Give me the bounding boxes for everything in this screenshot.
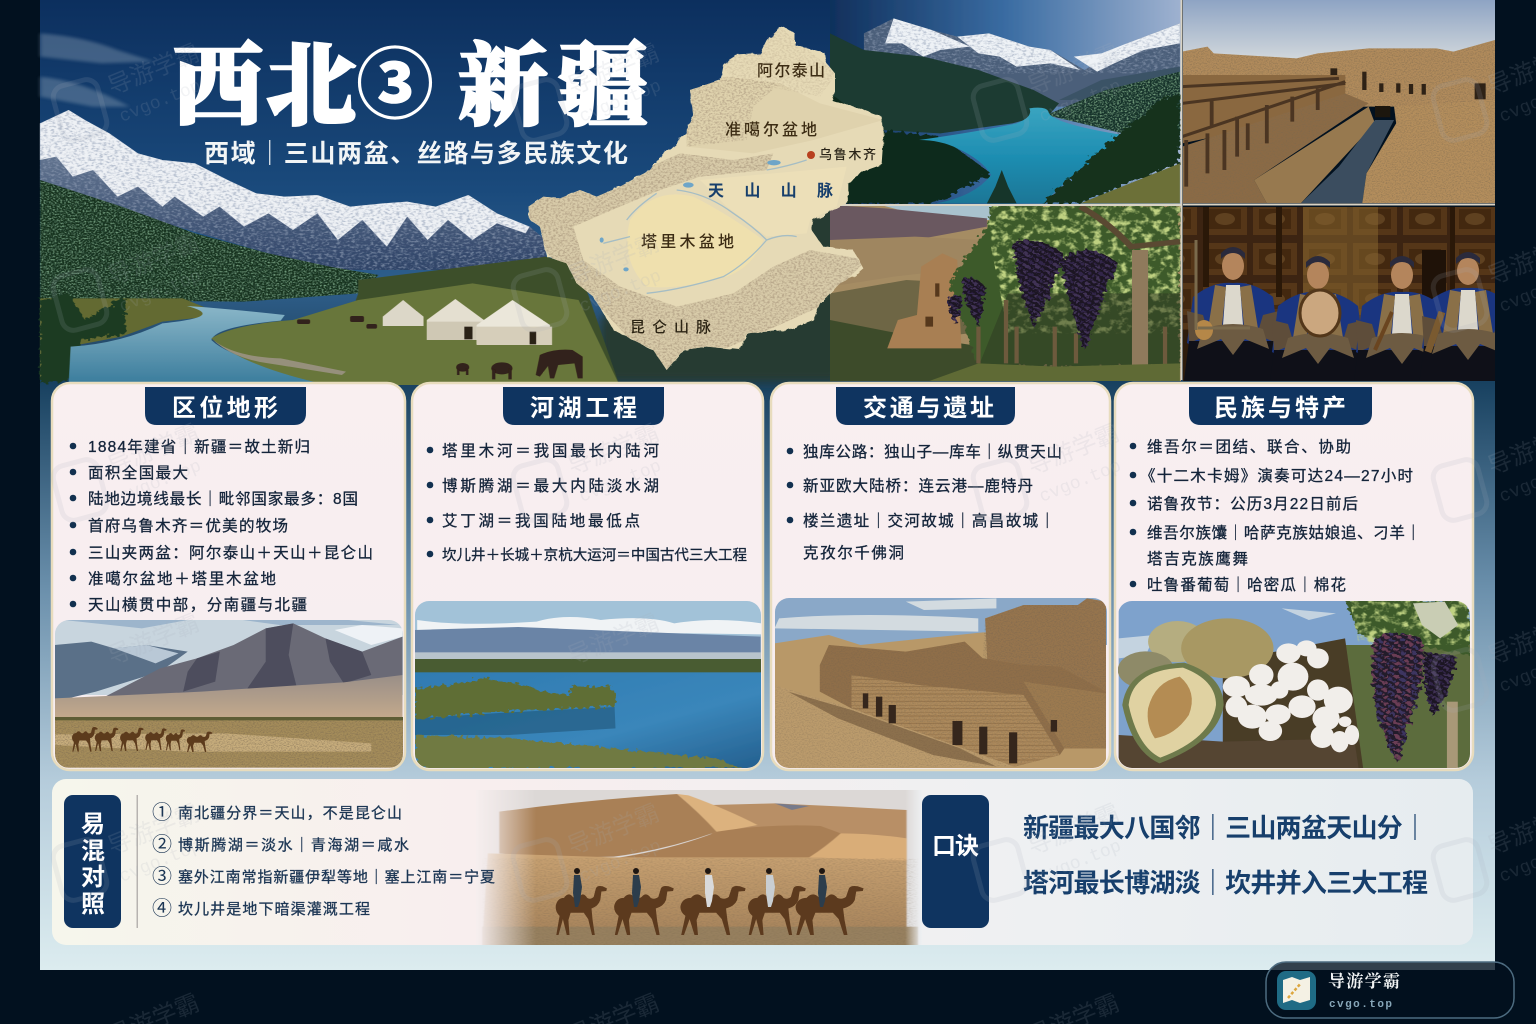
watermarks: 导游学霸	[564, 40, 663, 101]
photo: vineyard with mud ruins	[830, 205, 1182, 382]
bullet list: 塔里木河＝我国最长内陆河	[442, 442, 659, 460]
confusion list	[152, 801, 495, 920]
map labels: 塔里木盆地	[641, 233, 734, 251]
title: 新	[458, 38, 548, 137]
lower poster background	[40, 380, 1495, 970]
yurts	[383, 299, 552, 345]
watermarks: 导游学霸	[564, 800, 663, 861]
photo: ancient ruins and karez channel	[1182, 0, 1496, 203]
confusion list: 博斯腾湖＝淡水｜青海湖＝咸水	[178, 837, 409, 854]
divider	[136, 795, 138, 928]
watermarks: 导游学霸	[104, 420, 203, 481]
panel: rivers, lakes and engineering	[412, 383, 766, 770]
bullet list: 克孜尔千佛洞	[803, 544, 904, 562]
bullet list: 三山夹两盆：阿尔泰山＋天山＋昆仑山	[88, 544, 373, 562]
heading: transport and heritage: 交通与遗址	[863, 394, 994, 422]
bullet list: 诺鲁孜节：公历3月22日前后	[1147, 495, 1358, 513]
logo badge: cvgo.top	[1329, 999, 1392, 1011]
bullet list	[787, 443, 1062, 562]
tag: mnemonic	[922, 795, 989, 928]
bullet list: 陆地边境线最长｜毗邻国家最多：8国	[88, 489, 358, 508]
title: ③	[356, 41, 434, 129]
tag: easily confused: 照	[81, 891, 105, 918]
bullet list: 博斯腾湖＝最大内陆淡水湖	[442, 477, 659, 495]
image dividers	[830, 0, 1495, 380]
title: 北	[266, 38, 356, 137]
tag: easily confused: 易	[81, 811, 105, 838]
watermarks: 导游学霸	[104, 40, 203, 101]
watermarks: 导游学霸	[104, 800, 203, 861]
watermarks: cvgo.top	[117, 837, 204, 888]
confusion list: ④	[152, 897, 172, 920]
panel: transport and heritage sites	[770, 383, 1110, 770]
watermarks: cvgo.top	[117, 267, 204, 318]
tag: mnemonic: 口诀	[932, 833, 979, 860]
instruments	[1195, 240, 1442, 352]
map labels: 乌鲁木齐	[819, 147, 876, 162]
mnemonic text: 新疆最大八国邻｜三山两盆天山分｜	[1023, 813, 1428, 843]
bullet list: 天山横贯中部，分南疆与北疆	[88, 596, 307, 614]
watermarks: 导游学霸	[564, 420, 663, 481]
bullet list	[427, 442, 747, 564]
tag: easily confused: 对	[81, 864, 105, 891]
bullet list: 坎儿井＋长城＋京杭大运河＝中国古代三大工程	[442, 547, 747, 564]
heading: location and terrain	[145, 387, 306, 425]
logo badge: 导游学霸	[1328, 972, 1400, 991]
bullet list: 新亚欧大陆桥：连云港—鹿特丹	[803, 477, 1033, 495]
photo: Bosten Lake	[413, 595, 766, 769]
subtitle: 西域｜三山两盆、丝路与多民族文化	[204, 140, 628, 168]
panel: easily confused facts and mnemonic	[52, 779, 1473, 947]
watermarks: cvgo.top	[1037, 837, 1124, 888]
bullet list: 塔吉克族鹰舞	[1147, 550, 1248, 568]
sky	[40, 0, 840, 380]
map labels: 天山山脉	[708, 181, 833, 200]
watermarks: cvgo.top	[577, 837, 664, 888]
heading: ethnic culture and specialties	[1189, 387, 1372, 425]
watermarks: cvgo.top	[117, 457, 204, 508]
bullet list: 独库公路：独山子—库车｜纵贯天山	[803, 443, 1062, 461]
watermarks: 导游学霸	[564, 610, 663, 671]
bullet list: 维吾尔族馕｜哈萨克族姑娘追、刁羊｜	[1147, 524, 1421, 542]
bullet list: 首府乌鲁木齐＝优美的牧场	[88, 517, 288, 535]
map labels	[630, 62, 876, 336]
confusion list: 南北疆分界＝天山，不是昆仑山	[178, 805, 402, 822]
heading: rivers and lakes: 河湖工程	[530, 395, 637, 422]
map labels: 准噶尔盆地	[725, 121, 817, 139]
confusion list: ③	[152, 865, 172, 888]
logo badge	[1266, 962, 1514, 1018]
title	[173, 38, 648, 137]
watermarks: 导游学霸	[1024, 40, 1123, 101]
panel: ethnic culture and specialties	[1115, 383, 1473, 770]
watermarks: cvgo.top	[577, 77, 664, 128]
heading: ethnic culture and specialties: 民族与特产	[1214, 395, 1346, 422]
bullet list: 1884年建省｜新疆＝故土新归	[88, 438, 310, 456]
heading: rivers and lakes	[503, 387, 664, 425]
photo: desert camel caravan	[476, 780, 924, 947]
watermarks: 导游学霸	[104, 610, 203, 671]
watermarks: 导游学霸	[564, 230, 663, 291]
horses	[297, 316, 583, 379]
map of Xinjiang	[520, 27, 883, 373]
title: 西	[173, 38, 263, 137]
watermarks: cvgo.top	[1037, 77, 1124, 128]
title: 疆	[558, 38, 648, 137]
confusion list: ②	[152, 833, 172, 856]
photo: turquoise lake	[830, 0, 1182, 205]
bullet list: 维吾尔＝团结、联合、协助	[1147, 438, 1351, 456]
bullet list: 准噶尔盆地＋塔里木盆地	[88, 570, 276, 588]
heading: transport and heritage	[836, 387, 1015, 425]
bullet list: 楼兰遗址｜交河故城｜高昌故城｜	[803, 512, 1055, 530]
bullet list: 《十二木卡姆》演奏可达24—27小时	[1140, 467, 1413, 485]
watermarks: cvgo.top	[1037, 457, 1124, 508]
bullet list: 吐鲁番葡萄｜哈密瓜｜棉花	[1147, 576, 1346, 594]
watermarks: cvgo.top	[577, 457, 664, 508]
map labels: 阿尔泰山	[757, 62, 825, 80]
confusion list: 塞外江南常指新疆伊犁等地｜塞上江南＝宁夏	[178, 868, 495, 886]
photo: camels below mountains	[50, 615, 408, 768]
bullet list: 艾丁湖＝我国陆地最低点	[442, 512, 640, 530]
confusion list: 坎儿井是地下暗渠灌溉工程	[178, 901, 370, 918]
watermarks: 导游学霸	[104, 230, 203, 291]
photo: Loulan ruins	[770, 595, 1110, 768]
watermarks: cvgo.top	[577, 267, 664, 318]
tag: easily confused	[64, 795, 121, 928]
bullet list	[1130, 438, 1421, 594]
watermarks: 导游学霸	[1024, 420, 1123, 481]
mnemonic text	[1023, 813, 1428, 898]
mnemonic text: 塔河最长博湖淡｜坎井并入三大工程	[1023, 868, 1428, 898]
confusion list: ①	[152, 801, 172, 824]
watermarks: cvgo.top	[117, 77, 204, 128]
icon: folded map	[1277, 971, 1316, 1010]
left landscape: snow peaks, river, yurts	[40, 33, 619, 385]
dark terrain behind map	[600, 195, 840, 382]
panel: location and terrain	[50, 383, 408, 770]
map labels: 昆仑山脉	[630, 319, 711, 336]
photo: melons, cotton and grapes	[1118, 600, 1472, 770]
photo: muqam musicians	[1183, 207, 1495, 381]
bullet list	[70, 438, 373, 614]
bullet list: 面积全国最大	[88, 464, 188, 482]
tag: easily confused: 混	[81, 838, 105, 865]
heading: location and terrain: 区位地形	[172, 394, 278, 422]
watermarks: 导游学霸	[1024, 800, 1123, 861]
